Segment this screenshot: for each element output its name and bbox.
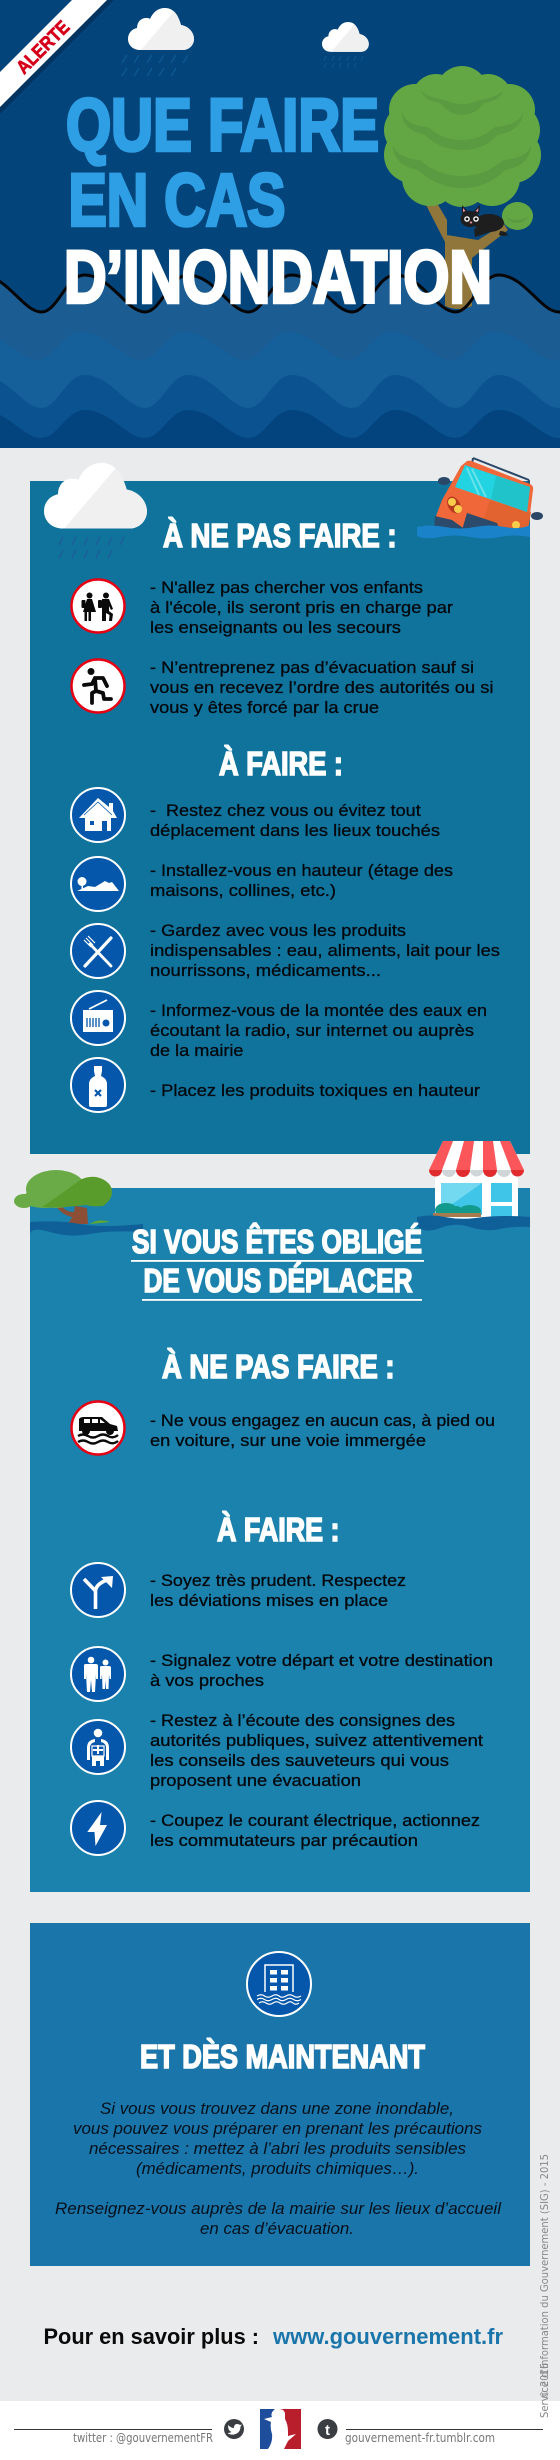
icon: flooded shop [417, 1141, 530, 1231]
text: hauteur [150, 861, 453, 900]
icon: panel cloud [44, 463, 147, 558]
text: préparation: en cas d’évacuation. [200, 2219, 354, 2238]
ribbon: alerte: ALERTE [13, 17, 74, 79]
text: consignes: - Restez à l’écoute des consignes des [150, 1711, 455, 1730]
text: évacuation: vous y êtes forcé par la crue [150, 698, 379, 717]
icon: cloud right [322, 22, 369, 68]
text: tumblr: gouvernement-fr.tumblr.com [345, 2431, 495, 2445]
title: QUE FAIRE [66, 84, 379, 166]
icon: lightning [71, 1801, 125, 1855]
icon: runner [72, 660, 124, 712]
icon: cutlery [71, 924, 125, 978]
icon: rescuer [71, 1720, 125, 1774]
text: radio [150, 1001, 487, 1060]
icon: hills [71, 857, 125, 911]
text: départ: - Signalez votre départ et votre destination [150, 1651, 493, 1670]
text: consignes: proposent une évacuation [150, 1771, 361, 1790]
text: enfants [150, 578, 453, 637]
heading: et dès maintenant: ET DÈS MAINTENANT [140, 2038, 425, 2075]
text: hauteur: maisons, collines, etc.) [150, 881, 336, 900]
text: courant: les commutateurs par précaution [150, 1831, 418, 1850]
text: voie immergée: - Ne vous engagez en aucun cas, à pied ou [150, 1411, 495, 1430]
text: produits: nourrissons, médicaments... [150, 961, 381, 980]
text: courant [150, 1811, 480, 1850]
text: produits: - Gardez avec vous les produits [150, 921, 406, 940]
header banner [0, 0, 560, 448]
text: restez chez vous: déplacement dans les lieux touchés [150, 821, 440, 840]
text: hauteur: - Installez-vous en hauteur (étage des [150, 861, 453, 880]
logo: république française [260, 2409, 301, 2449]
text: départ: à vos proches [150, 1671, 264, 1690]
text: préparation: vous pouvez vous préparer en prenant les précautions [73, 2119, 482, 2138]
text: twitter: twitter : @gouvernementFR [73, 2431, 213, 2445]
text: voie immergée [150, 1411, 495, 1450]
heading: si vous êtes obligé de vous déplacer: SI VOUS ÊTES OBLIGÉ [132, 1223, 422, 1260]
icon: car in water [417, 458, 543, 538]
text: préparation: (médicaments, produits chimiques…). [136, 2159, 419, 2178]
text: évacuation: vous en recevez l’ordre des autorités ou si [150, 678, 494, 697]
credit: vertical: Service d'Information du Gouvernement (SIG) - 2015 [538, 2154, 551, 2418]
icon: cloud left [122, 8, 194, 76]
credit: vertical: © 2016 [538, 2363, 551, 2399]
text: préparation [55, 2099, 502, 2238]
panel: si vous êtes obligé [14, 1141, 530, 1892]
ribbon: alerte [0, 0, 114, 114]
text: déviations: - Soyez très prudent. Respectez [150, 1571, 406, 1590]
panel: que faire 1 [30, 458, 543, 1154]
text: enfants: les enseignants ou les secours [150, 618, 401, 637]
heading: à faire: À FAIRE : [217, 1511, 340, 1548]
panel: et dès maintenant [30, 1923, 530, 2266]
text: départ [150, 1651, 493, 1690]
icon: tree with cat [384, 66, 541, 309]
text: radio: de la mairie [150, 1041, 244, 1060]
text: radio: - Informez-vous de la montée des eaux en [150, 1001, 487, 1020]
text: pour en savoir plus [44, 2324, 503, 2349]
text: déviations: les déviations mises en place [150, 1591, 388, 1610]
text: consignes: autorités publiques, suivez attentivement [150, 1731, 483, 1750]
text: toxiques: - Placez les produits toxiques en hauteur [150, 1081, 480, 1100]
icon: flooded tree [14, 1170, 143, 1236]
text: pour en savoir plus: www.gouvernement.fr [272, 2324, 503, 2349]
text: voie immergée: en voiture, sur une voie immergée [150, 1431, 426, 1450]
text: courant: - Coupez le courant électrique, actionnez [150, 1811, 480, 1830]
text: préparation: Si vous vous trouvez dans une zone inondable, [100, 2099, 454, 2118]
footer [0, 2401, 560, 2460]
heading: à faire: À FAIRE : [219, 745, 343, 782]
icon: house [71, 788, 125, 842]
text: consignes: les conseils des sauveteurs qui vous [150, 1751, 449, 1770]
text: évacuation: - N’entreprenez pas d’évacuation sauf si [150, 658, 474, 677]
icon: radio [71, 991, 125, 1045]
icon: car in flood [72, 1402, 124, 1454]
icon: tumblr: t [325, 2422, 330, 2439]
icon: tumblr [318, 2419, 338, 2439]
title [64, 84, 492, 318]
icon: two people [71, 1647, 125, 1701]
text: enfants: à l'école, ils seront pris en charge par [150, 598, 453, 617]
text: déviations [150, 1571, 406, 1610]
heading: à ne pas faire: À NE PAS FAIRE : [163, 517, 396, 554]
text: produits: indispensables : eau, aliments, lait pour les [150, 941, 500, 960]
text: préparation: nécessaires : mettez à l’abri les produits sensibles [89, 2139, 466, 2158]
text: pour en savoir plus: Pour en savoir plus : [44, 2324, 259, 2349]
text: restez chez vous: - Restez chez vous ou évitez tout [150, 801, 421, 820]
wave line [0, 275, 560, 312]
text: restez chez vous [150, 801, 440, 840]
icon: flooded building [247, 1952, 311, 2016]
icon: children [72, 580, 124, 632]
icon: twitter [224, 2419, 244, 2439]
text: évacuation [150, 658, 494, 717]
text: enfants: - N'allez pas chercher vos enfants [150, 578, 423, 597]
heading: à ne pas faire: À NE PAS FAIRE : [162, 1348, 394, 1385]
text: radio: écoutant la radio, sur internet ou auprès [150, 1021, 474, 1040]
text: consignes [150, 1711, 483, 1790]
text: préparation: Renseignez-vous auprès de la mairie sur les lieux d’accueil [55, 2199, 502, 2218]
icon: deviation arrow [71, 1563, 125, 1617]
icon: toxic bottle [71, 1058, 125, 1112]
water layers [0, 275, 560, 448]
title: EN CAS [68, 158, 286, 242]
heading: si vous êtes obligé de vous déplacer: DE VOUS DÉPLACER [144, 1262, 413, 1299]
text: produits [150, 921, 500, 980]
heading: si vous êtes obligé de vous déplacer [131, 1223, 424, 1301]
